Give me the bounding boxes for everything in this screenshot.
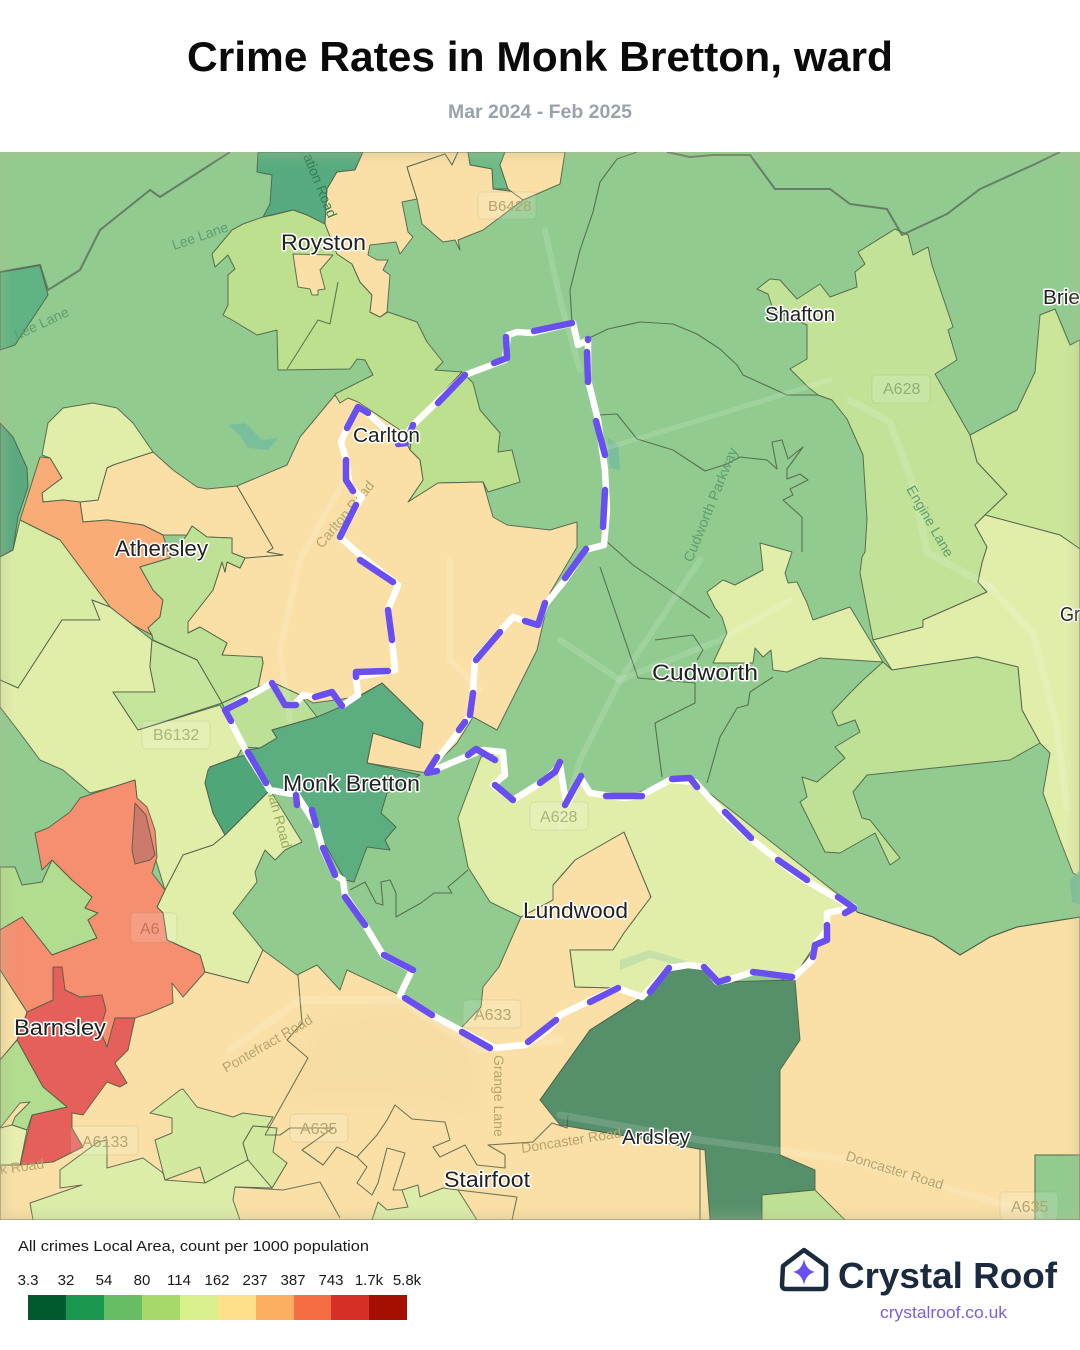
legend scale labels: 80 <box>134 1272 150 1289</box>
place labels: Lundwood <box>523 898 628 923</box>
legend scale labels: 54 <box>96 1272 112 1289</box>
road labels: A628 <box>540 809 577 826</box>
subtitle: date range: Mar 2024 - Feb 2025 <box>448 102 632 123</box>
region boundaries in green areas <box>0 152 1080 1220</box>
road labels: A635 <box>300 1121 337 1138</box>
place labels: Stairfoot <box>444 1167 530 1192</box>
road labels: Grange Lane <box>491 1055 507 1137</box>
road labels: Doncaster Road <box>844 1148 946 1192</box>
ward boundary: white outline <box>225 323 854 1048</box>
road labels: Engine Lane <box>903 482 957 560</box>
place labels: Carlton <box>353 425 420 447</box>
legend colour swatches <box>28 1295 407 1320</box>
road labels: B6132 <box>153 727 199 744</box>
logo wordmark: Crystal Roof <box>838 1255 1058 1296</box>
place labels: Cudworth <box>652 660 758 685</box>
legend scale labels: 387 <box>280 1272 306 1289</box>
road labels: Cudworth Parkway <box>680 445 740 564</box>
road labels: Lee Lane <box>12 303 71 343</box>
road labels: Doncaster Road <box>520 1124 622 1156</box>
legend scale labels: 1.7k <box>355 1272 384 1289</box>
place labels: Barnsley <box>14 1015 106 1040</box>
road labels: A6 <box>140 921 160 938</box>
place labels: Monk Bretton <box>283 771 420 796</box>
legend title: All crimes Local Area, count per 1000 population <box>18 1238 369 1255</box>
place labels: Athersley <box>115 536 208 561</box>
place labels: Ardsley <box>622 1127 690 1149</box>
title: Crime Rates in Monk Bretton, ward <box>187 33 893 80</box>
place labels: Royston <box>281 230 366 255</box>
ward boundary: purple dashes <box>225 323 854 1048</box>
road labels: Pontefract Road <box>220 1011 315 1076</box>
road labels: B6428 <box>488 198 531 215</box>
road labels <box>0 151 1058 1220</box>
map regions <box>0 152 1080 1220</box>
road labels: Carlton Road <box>312 477 377 551</box>
road labels: A633 <box>474 1007 511 1024</box>
roads <box>230 230 1067 1215</box>
website url: crystalroof.co.uk <box>880 1303 1008 1322</box>
road labels: A6133 <box>82 1134 128 1151</box>
shaded tan patch <box>461 1026 463 1028</box>
legend scale labels: 237 <box>242 1272 268 1289</box>
place labels <box>14 230 1080 1192</box>
road labels: A635 <box>1011 1199 1048 1216</box>
legend scale labels: 162 <box>204 1272 230 1289</box>
water features <box>228 423 1080 970</box>
place labels: Brie <box>1043 287 1080 309</box>
legend scale labels: 114 <box>167 1272 191 1289</box>
legend <box>18 1238 422 1320</box>
legend scale labels: 743 <box>318 1272 344 1289</box>
road labels: ation Road <box>300 151 340 220</box>
legend scale labels: 5.8k <box>393 1272 422 1289</box>
road labels: Lee Lane <box>170 219 230 253</box>
legend scale labels: 32 <box>58 1272 74 1289</box>
legend scale labels: 3.3 <box>18 1272 38 1289</box>
road labels: ian Road <box>265 792 295 850</box>
choropleth map <box>0 150 1080 1222</box>
place labels: Shafton <box>765 304 835 326</box>
logo: Crystal Roof <box>782 1250 1058 1322</box>
road labels: A628 <box>883 381 920 398</box>
icon: house with star <box>782 1250 826 1289</box>
legend scale labels <box>18 1272 422 1289</box>
